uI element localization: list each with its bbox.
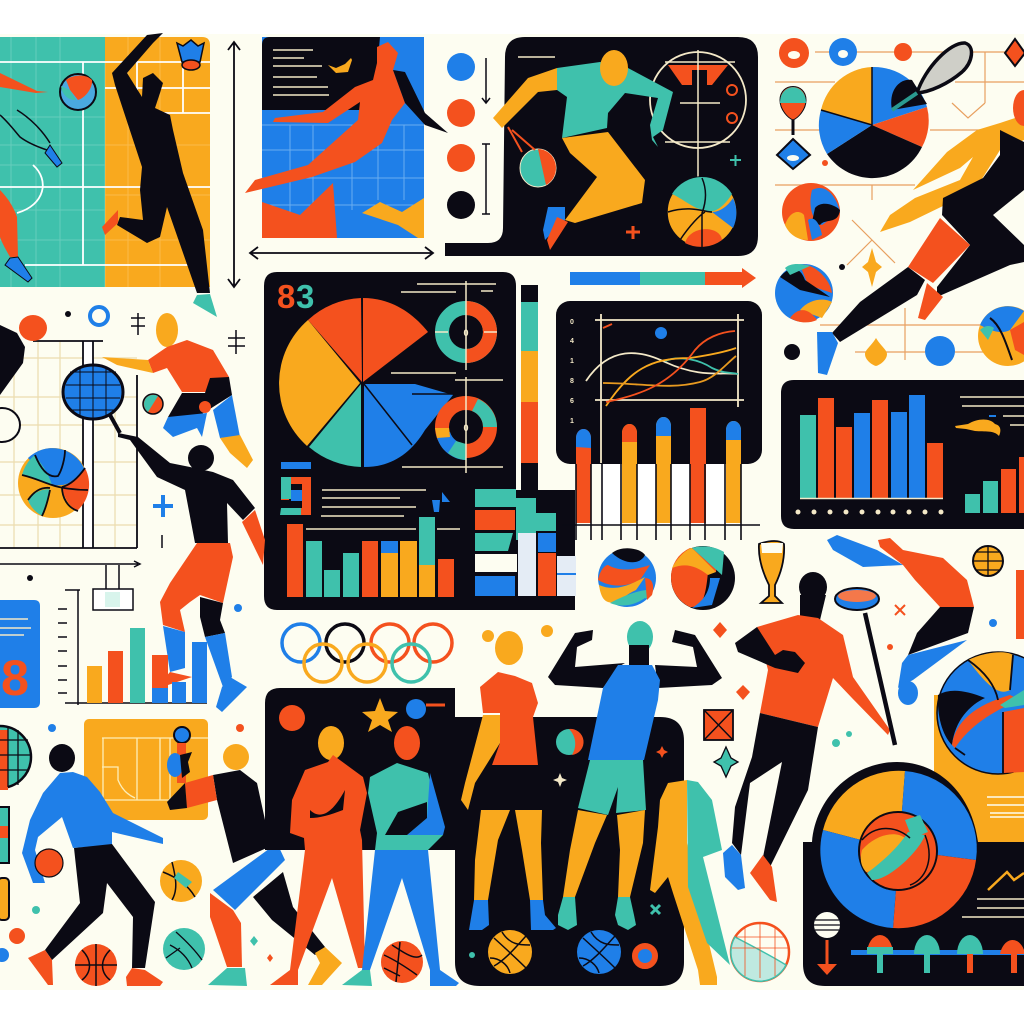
text lines xyxy=(391,284,496,373)
flexing player in blue xyxy=(548,621,722,930)
decoration marks xyxy=(704,622,852,777)
bars xyxy=(800,395,943,498)
cross and hash marks xyxy=(27,307,245,612)
marble ball three xyxy=(978,306,1024,366)
ball on court xyxy=(60,74,96,110)
scoreboard emblem xyxy=(650,50,746,177)
decorative connector lines xyxy=(775,52,1024,360)
sprinter xyxy=(817,90,1024,375)
Olympic rings xyxy=(282,624,452,682)
main pie chart xyxy=(279,298,453,467)
microphone and arrow xyxy=(814,912,840,975)
woman in orange shirt xyxy=(461,625,556,930)
axis labels: 8 xyxy=(570,378,574,385)
small racket outline xyxy=(0,408,20,442)
block matrix xyxy=(475,489,576,596)
teal player xyxy=(493,50,673,250)
panel: court with jumping player xyxy=(0,33,217,317)
black player with red shorts xyxy=(118,433,265,712)
axis labels: 1 xyxy=(570,418,574,425)
big ball xyxy=(18,448,89,518)
target xyxy=(635,946,655,966)
orange head figure at edge xyxy=(0,315,47,395)
small chart line xyxy=(988,872,1024,890)
goal diagram xyxy=(93,565,133,610)
black jumping figure xyxy=(102,33,217,317)
panel: central pie dashboard: 3 xyxy=(296,278,314,315)
number heading 5 xyxy=(280,462,311,515)
hand-held icon xyxy=(167,727,192,783)
bird icon xyxy=(328,58,352,73)
progress arrow xyxy=(570,268,756,288)
panel: big basketball with yellow card xyxy=(934,652,1024,845)
orange and blue player at edge xyxy=(0,73,62,282)
two-tone figure from behind xyxy=(650,780,730,985)
horizontal arrow xyxy=(250,247,433,259)
bar chart xyxy=(287,517,454,597)
line chart xyxy=(586,314,744,463)
racket xyxy=(892,43,971,110)
orange crossed-arm player xyxy=(270,726,367,985)
axis labels: 1 xyxy=(570,358,574,365)
donut chart top xyxy=(435,281,497,370)
bar chart with rounded tops xyxy=(562,408,760,540)
orange diver xyxy=(245,42,405,193)
panel: donut with basketball dark card xyxy=(803,762,1024,986)
swimmer icon xyxy=(955,420,1000,436)
basketball xyxy=(488,930,532,974)
racket xyxy=(508,127,556,187)
basketball xyxy=(859,812,937,890)
runner with club xyxy=(723,572,895,902)
panel: diver poster xyxy=(245,37,448,238)
marble ball one xyxy=(782,183,840,241)
panel: tennis player dark card xyxy=(445,37,758,256)
info card: number 83: 8 xyxy=(1,650,29,706)
balls lower left xyxy=(75,860,423,986)
racket xyxy=(63,365,123,433)
marble ball two xyxy=(775,264,833,322)
info card: number 83 xyxy=(0,600,40,708)
marker dots xyxy=(447,53,490,219)
trophy cup xyxy=(759,541,784,603)
blue ball xyxy=(577,930,621,974)
text lines xyxy=(273,50,329,95)
pie ring xyxy=(820,771,977,928)
trophy badge xyxy=(177,40,204,70)
panel: pie and sprinter top right xyxy=(775,38,1024,375)
globe icon xyxy=(973,546,1003,576)
teal crossed-arm player xyxy=(342,726,459,986)
ball: blue teal orange xyxy=(598,548,656,607)
axis labels xyxy=(570,319,574,425)
panel: net court with racket player xyxy=(0,315,265,712)
ball: orange yellow teal xyxy=(671,546,735,610)
axis labels: 4 xyxy=(570,338,574,345)
mini bars xyxy=(965,457,1024,513)
pie chart xyxy=(819,67,929,178)
donut chart bottom xyxy=(402,377,503,473)
orange figure with teal ball xyxy=(102,313,253,468)
ball xyxy=(667,177,737,247)
vertical arrow xyxy=(228,42,240,287)
number heading 83: 8 xyxy=(277,278,295,315)
panel: yellow maze card xyxy=(84,719,208,820)
axis labels: 0 xyxy=(570,319,574,326)
donut chart top: 0 xyxy=(463,328,469,338)
donut chart bottom: 0 xyxy=(463,423,469,433)
small icons xyxy=(777,38,1024,169)
panel: central pie dashboard xyxy=(264,272,576,610)
star and dots xyxy=(784,248,955,366)
text lines xyxy=(306,490,460,529)
panel: bar chart dark card right xyxy=(781,380,1024,529)
axis labels: 6 xyxy=(570,398,574,405)
partial globe ball left xyxy=(0,724,244,962)
stacked column xyxy=(516,285,538,498)
panel: diving figure right xyxy=(827,535,1024,705)
dots xyxy=(796,510,944,514)
netted ball xyxy=(731,923,789,981)
panel: line chart dark card xyxy=(556,301,762,464)
marker row xyxy=(851,935,1024,973)
small bar chart xyxy=(58,590,207,705)
blue shirt player xyxy=(22,744,163,986)
crouching player xyxy=(167,727,342,986)
panel: team dark card xyxy=(265,688,684,986)
text lines xyxy=(960,397,1024,425)
